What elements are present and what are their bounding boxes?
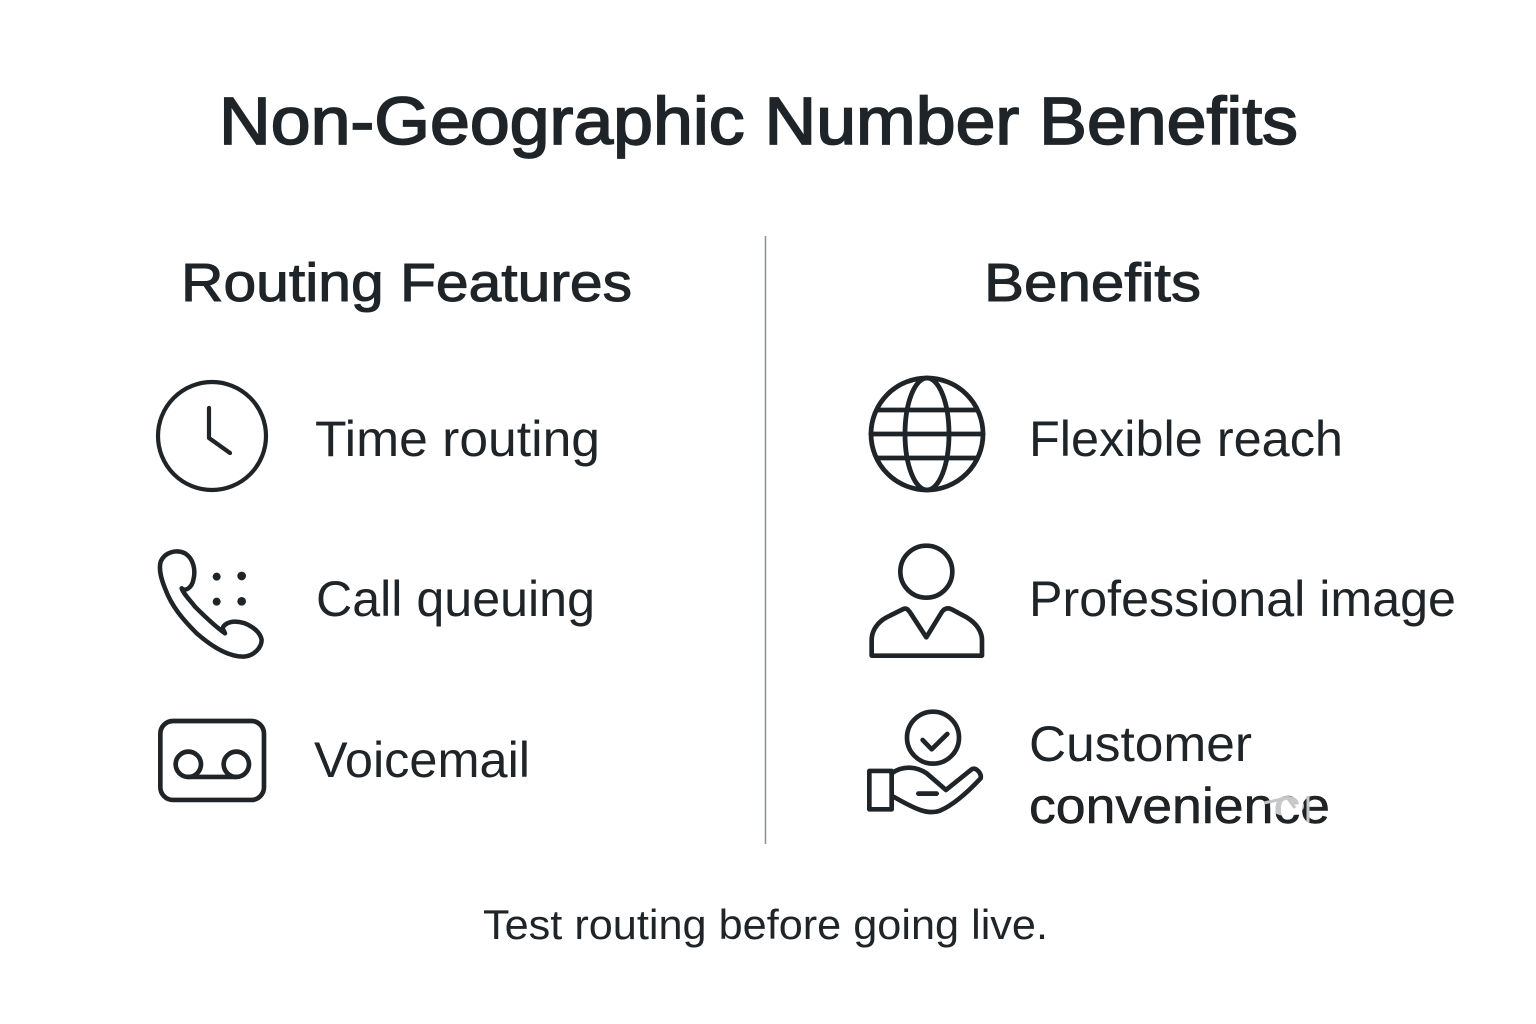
label: flexible reach: Flexible reach: [1029, 411, 1343, 467]
footer note: Test routing before going live.: [483, 901, 1048, 948]
label: customer convenience: Customer: [1029, 716, 1252, 772]
heading: routing features: Routing Features: [181, 253, 632, 313]
icon: globe: [871, 378, 983, 490]
panel: benefits: [869, 253, 1456, 834]
label: voicemail: Voicemail: [314, 732, 530, 788]
label: customer convenience: convenience: [1029, 778, 1330, 834]
title: Non-Geographic Number Benefits: [219, 84, 1298, 159]
label: professional image: Professional image: [1029, 571, 1456, 627]
panel: routing features: [158, 253, 632, 800]
label: call queuing: Call queuing: [316, 571, 595, 627]
label: customer convenience: [1029, 716, 1330, 834]
label: time routing: Time routing: [315, 411, 600, 467]
icon: professional person: [872, 546, 982, 656]
heading: benefits: Benefits: [984, 253, 1201, 313]
icon: voicemail: [160, 721, 264, 800]
icon: clock: [158, 382, 266, 490]
icon: hand with check: [869, 712, 981, 812]
icon: phone keypad: [160, 551, 262, 657]
